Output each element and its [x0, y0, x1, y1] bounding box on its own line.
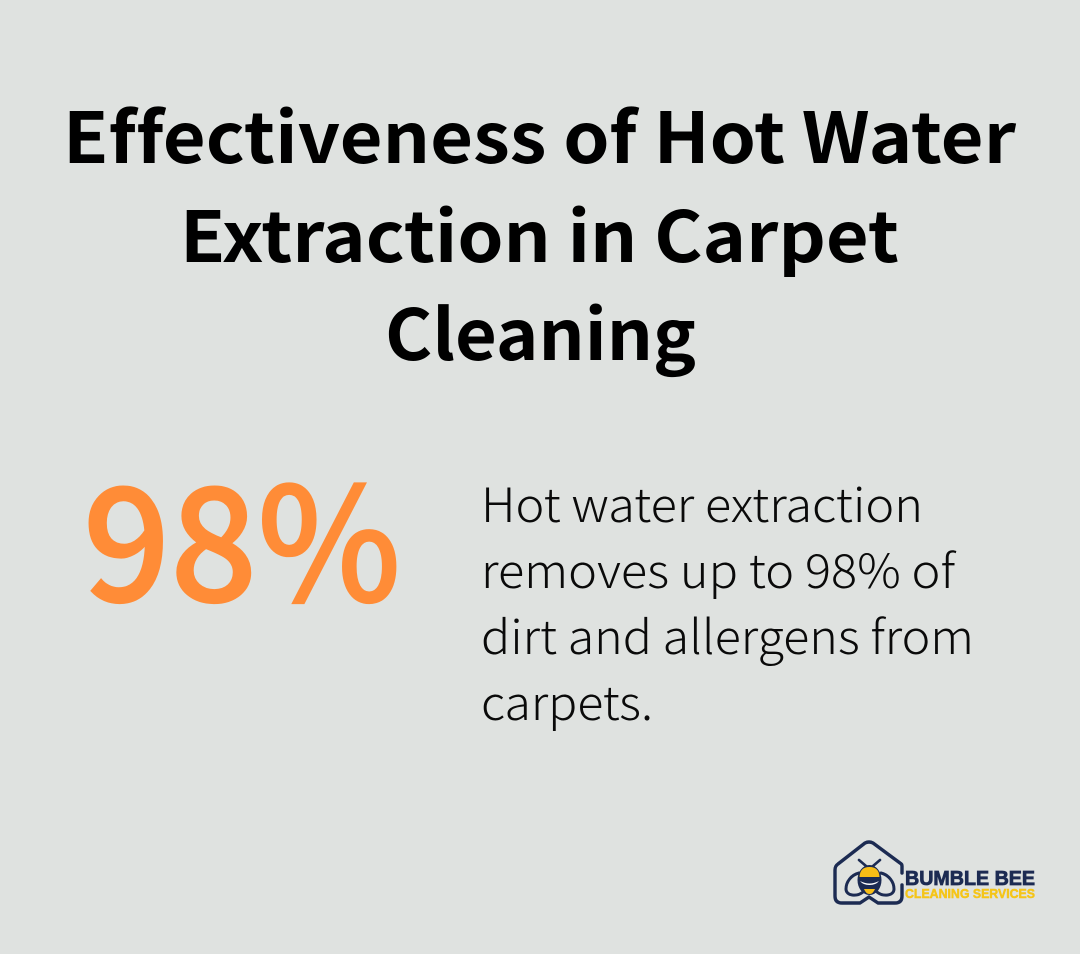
title — [63, 83, 1017, 381]
big statistic: 98%: 98% — [83, 420, 401, 647]
title: Effectiveness of Hot Water — [63, 83, 1017, 184]
title: Extraction in Carpet — [180, 182, 899, 283]
logo wordmark: BUMBLE BEE — [905, 868, 1035, 890]
title: Cleaning — [385, 280, 696, 381]
description text: dirt and allergens from — [481, 599, 974, 668]
icon: bee body — [858, 865, 882, 895]
description text: carpets. — [481, 665, 653, 734]
description text: Hot water extraction — [481, 467, 923, 536]
icon: house outline with bee — [835, 842, 902, 903]
logo: Bumble Bee Cleaning Services — [835, 842, 1035, 903]
description text — [481, 467, 974, 734]
logo tagline: CLEANING SERVICES — [905, 887, 1035, 901]
description text: removes up to 98% of — [481, 533, 957, 602]
